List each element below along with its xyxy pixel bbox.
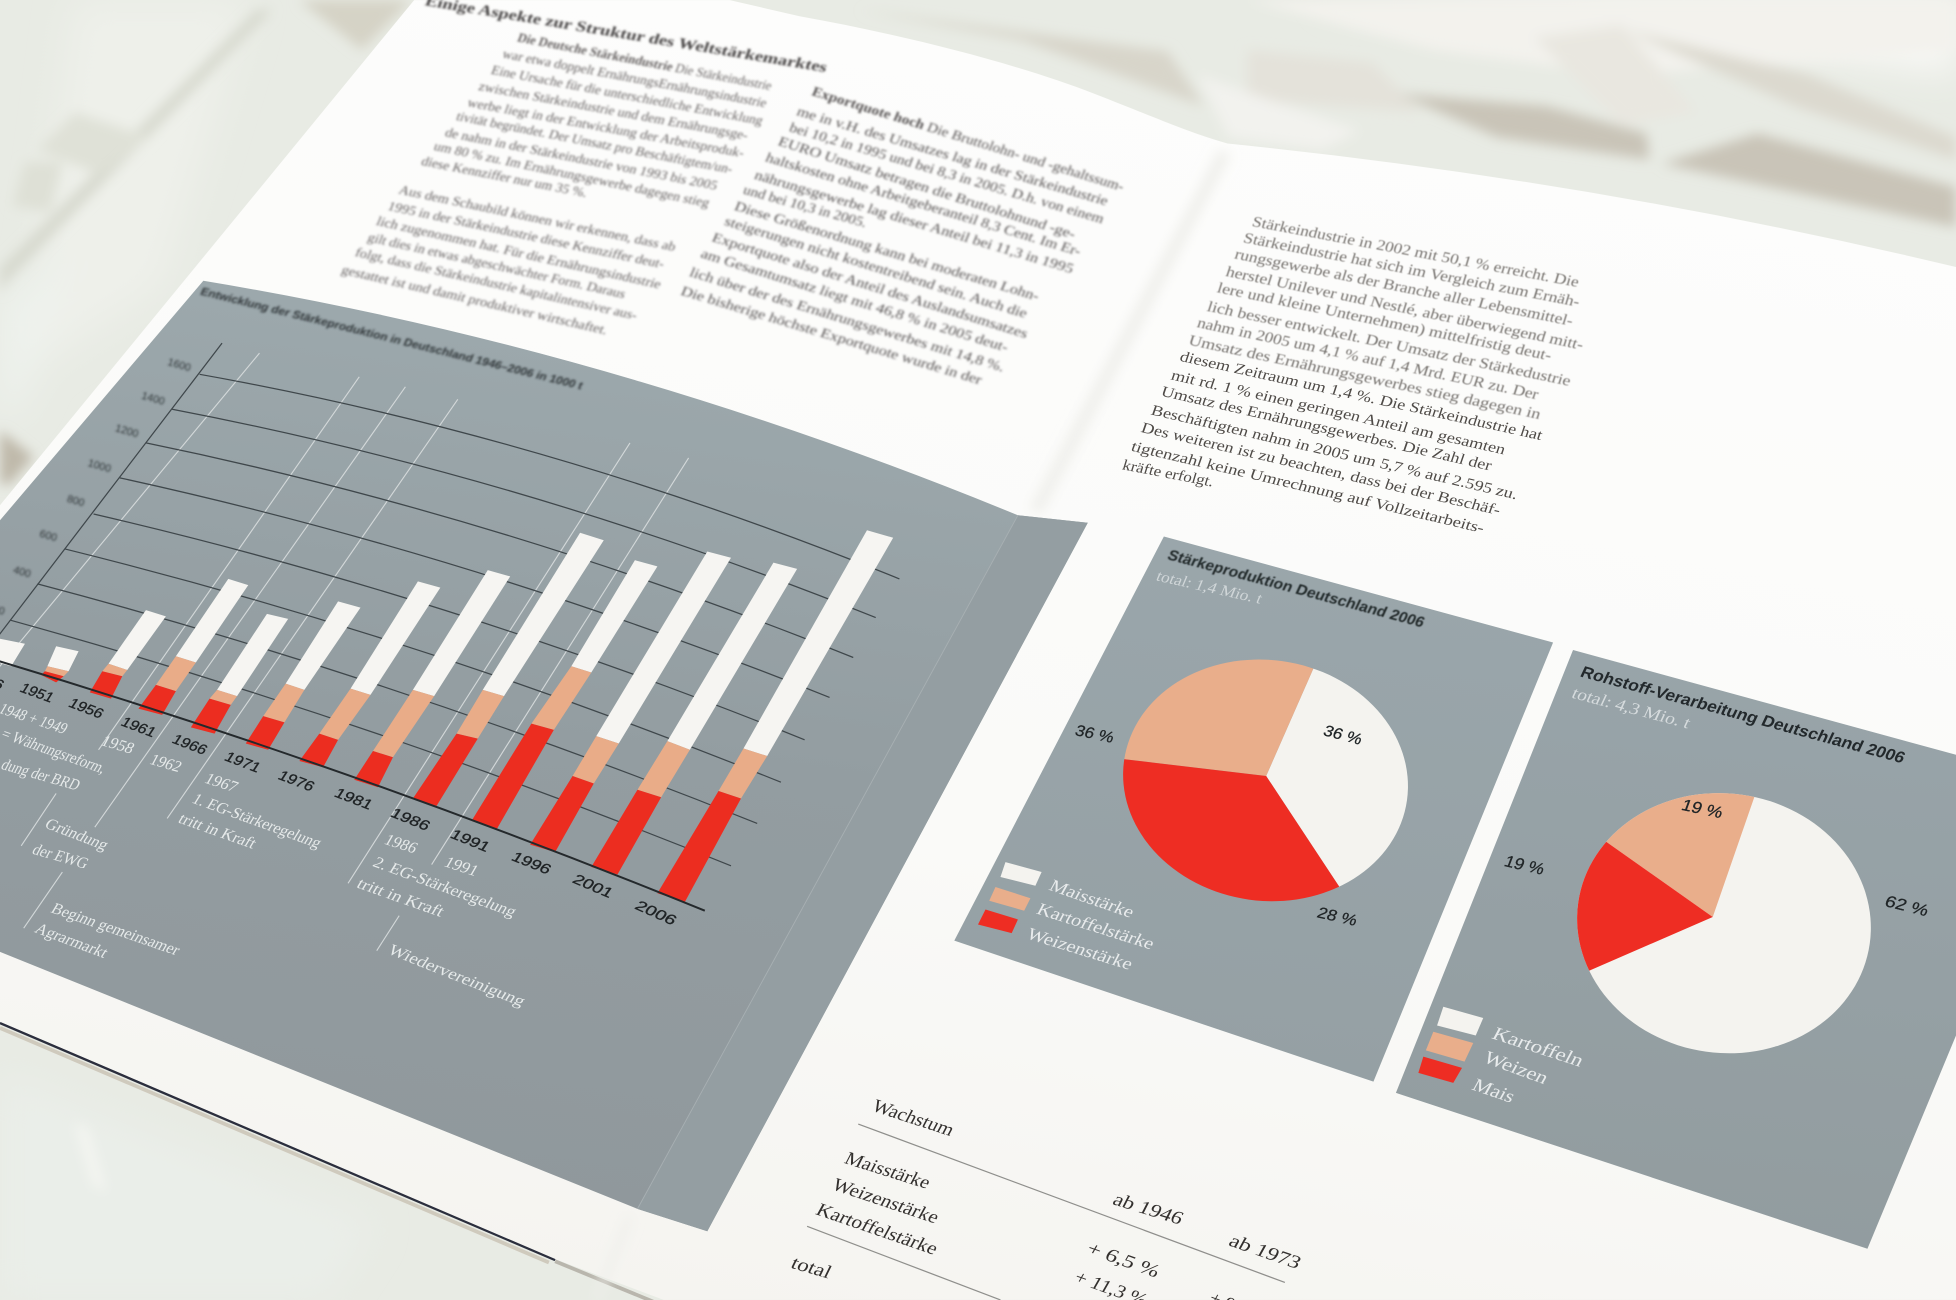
text block: left column: de nahm in der Stärkeindustrie von 1993 bis 2005 <box>443 127 719 193</box>
chart grid and axes <box>0 343 899 866</box>
legend: Kartoffeln <box>1488 1025 1588 1072</box>
year labels: 1961 <box>118 715 159 741</box>
timeline marker lines <box>0 353 689 951</box>
y axis labels <box>0 355 193 618</box>
legend: Weizen <box>1479 1048 1552 1089</box>
text block: right page upper lines: rungsgewerbe als der Branche aller Lebensmittel- <box>1233 245 1575 329</box>
year labels: 1966 <box>169 733 210 758</box>
text block: right page lower lines: mit rd. 1 % einen geringen Anteil am gesamten <box>1169 366 1508 458</box>
legend: Weizenstärke <box>1023 926 1136 974</box>
legend: Kartoffelstärke <box>1033 901 1157 954</box>
text block: middle column: bei 10,2 in 1995 und bei 8,3 in 2005. D.h. von einem <box>787 121 1107 227</box>
timeline event labels: 1986 <box>381 830 422 857</box>
pie value labels: 28 % <box>1315 904 1360 929</box>
pie value labels: 19 % <box>1679 795 1726 822</box>
text block: right page lower lines: Des weiteren ist zu beachten, dass bei der Beschäf- <box>1139 419 1503 519</box>
text block: left column: lich zugenommen hat. Für die Ernährungsindustrie <box>374 215 663 292</box>
year labels: 1996 <box>508 850 554 878</box>
text block: right page lower lines: Beschäftigten nahm in 2005 um 5,7 % auf 2.595 zu. <box>1149 401 1520 503</box>
year labels <box>0 668 679 929</box>
table: Wachstum: Weizenstärke <box>828 1176 943 1228</box>
text block: right page lower lines: Umsatz des Ernährungsgewerbes. Die Zahl der <box>1159 382 1494 474</box>
timeline event labels: 2. EG-Stärkeregelung <box>370 853 521 920</box>
text block: left column: tivität begründet. Der Umsatz pro Beschäftigtem/un- <box>454 110 735 177</box>
year labels: 1991 <box>447 828 493 855</box>
pie chart <box>1123 660 1408 902</box>
pie value labels: 36 % <box>1073 722 1117 746</box>
text block: right page lower lines: kräfte erfolgt. <box>1120 456 1216 490</box>
text block: middle column: me in v.H. des Umsatzes lag in der Stärkeindustrie <box>794 104 1110 209</box>
stacked bars <box>0 530 893 902</box>
year labels: 1971 <box>221 750 263 776</box>
timeline event labels: 1. EG-Stärkeregelung <box>189 789 326 852</box>
y axis labels: 800 <box>66 492 86 509</box>
year labels: 1981 <box>331 786 375 813</box>
legend: Mais <box>1468 1076 1518 1107</box>
pie value labels <box>1073 722 1365 929</box>
pie value labels: 36 % <box>1321 722 1365 748</box>
legend <box>1418 1007 1588 1107</box>
text block: middle column: am Gesamtumsatz liegt mit 46,8 % in 2005 deut- <box>698 247 1011 355</box>
text block: middle column: Exportquote hoch Die Bruttolohn- und -gehaltssum- <box>809 85 1127 195</box>
table: Wachstum: Wachstum <box>868 1097 958 1141</box>
text block: left column <box>339 32 774 338</box>
year labels: 2001 <box>569 873 616 901</box>
text block: middle column: Exportquote also der Anteil des Auslandsumsatzes <box>710 230 1030 342</box>
legend: Maisstärke <box>1045 877 1137 922</box>
pie chart <box>1577 793 1871 1054</box>
year labels: 1976 <box>275 769 317 795</box>
panel: starch production bar chart <box>0 281 1088 1231</box>
timeline event labels: dung der BRD <box>0 755 84 794</box>
y axis labels: 400 <box>12 563 33 580</box>
text block: middle column: Die bisherige höchste Exportquote wurde in der <box>678 284 985 388</box>
panel: Stärkeproduktion Deutschland 2006 <box>954 536 1553 1082</box>
text block: middle column: und bei 10,3 in 2005. <box>741 183 869 231</box>
text block: left column: Eine Ursache für die unterschiedliche Entwicklung <box>489 64 766 129</box>
text block: left column: gestattet ist und damit produktiver wirtschaftet. <box>339 264 609 338</box>
y axis labels: 1600 <box>166 355 193 374</box>
table: Wachstum: Kartoffelstärke <box>812 1201 942 1259</box>
table: Wachstum: ab 1973 <box>1225 1232 1304 1273</box>
pie value labels: 62 % <box>1882 892 1932 920</box>
text block: left column: war etwa doppelt Ernährungs­Ernährungsindustrie <box>500 48 769 111</box>
text block: middle column: steigerungen nicht kostentreibend sein. Auch die <box>722 214 1030 321</box>
y axis labels: 600 <box>38 527 59 544</box>
timeline event labels: 1991 <box>441 853 483 880</box>
table: Wachstum: ab 1946 <box>1109 1190 1187 1229</box>
legend <box>978 862 1157 974</box>
panel title: Rohstoff-Verarbeitung Deutschland 2006 <box>1578 662 1908 767</box>
panel subtitle: total: 1,4 Mio. t <box>1154 567 1266 607</box>
y axis labels: 1400 <box>140 389 167 407</box>
text block: left column: Die Deutsche Stärkeindustrie Die Stärkeindustrie <box>515 32 774 94</box>
year labels: 1951 <box>17 681 56 706</box>
text block: middle column: haltskosten ohne Arbeitgeberanteil 8,3 Cent. Im Er- <box>763 151 1084 259</box>
pie value labels: 19 % <box>1502 852 1548 878</box>
text block: right page upper lines: nahm in 2005 um 4,1 % auf 1,4 Mrd. EUR zu. Der <box>1195 314 1541 403</box>
panel subtitle: total: 4,3 Mio. t <box>1569 684 1694 732</box>
y axis labels: 1000 <box>87 456 113 475</box>
text block: left column: um 80 % zu. Im Ernährungsgewerbe dagegen stieg <box>431 140 712 211</box>
text block: left column: zwischen Stärkeindustrie und dem Ernährungsge- <box>476 80 751 143</box>
text block: right page lower lines: diesem Zeitraum um 1,4 %. Die Stärkeindustrie hat <box>1178 347 1546 444</box>
text block: right page upper lines: Stärkeindustrie in 2002 mit 50,1 % erreicht. Die <box>1250 213 1581 291</box>
timeline event labels: tritt in Kraft <box>175 809 261 852</box>
year labels: 2006 <box>631 899 679 929</box>
timeline event labels: tritt in Kraft <box>354 874 449 920</box>
text block: right page upper lines: herstel Unilever und Nestlé, aber überwiegend mitt- <box>1224 263 1586 353</box>
text block: right page upper lines: lere und kleine Unternehmen) mittelfristig deut- <box>1215 279 1554 364</box>
text block: right page upper lines: lich besser entwickelt. Der Umsatz der Stärkedustrie <box>1205 298 1573 389</box>
text block: right page lower lines <box>1120 347 1546 537</box>
text block: left column: gilt dies in etwas abgeschwächter Form. Daraus <box>365 231 628 302</box>
timeline event labels: Gründung <box>42 814 113 854</box>
timeline event labels <box>0 699 530 1010</box>
timeline event labels: 1958 <box>98 731 138 757</box>
text block: right page upper lines <box>1186 213 1586 423</box>
timeline event labels: Wiedervereinigung <box>385 940 530 1010</box>
table: Wachstum: + 6,5 % <box>1083 1239 1163 1282</box>
baseline <box>0 656 705 911</box>
panel title: Stärkeproduktion Deutschland 2006 <box>1165 546 1428 631</box>
timeline event labels: 1967 <box>201 769 242 796</box>
timeline event labels: 1962 <box>147 750 186 775</box>
timeline event labels: Beginn gemeinsamer <box>48 899 185 959</box>
text block: right page upper lines: Stärkeindustrie hat sich im Vergleich zum Ernäh- <box>1241 229 1582 310</box>
text block: left column: folgt, dass die Stärkeindustrie kapitalintensiver aus- <box>353 246 640 323</box>
text block: middle column: Diese Größenordnung kann bei moderaten Lohn- <box>732 199 1042 304</box>
text block: left column: 1995 in der Stärkeindustrie diese Kennziffer deut- <box>385 200 667 272</box>
text block: middle column: lich über der des Ernährungsgewerbes mit 14,8 %. <box>687 265 1007 375</box>
text block: middle column: EURO Umsatz betragen die Bruttolohnund -ge- <box>776 134 1078 242</box>
year labels: 1956 <box>65 697 106 722</box>
text block: middle column: nährungsgewerbe lag dieser Anteil bei 11,3 in 1995 <box>752 168 1076 277</box>
timeline event labels: = Währungsreform, <box>0 724 110 777</box>
panel: Rohstoff-Verarbeitung Deutschland 2006 <box>1396 650 1956 1249</box>
table: Wachstum <box>787 1097 1304 1300</box>
year labels: 1986 <box>387 806 433 834</box>
text block: right page lower lines: tigtenzahl keine Umrechnung auf Vollzeitarbeits- <box>1129 437 1487 537</box>
text block: middle column <box>678 85 1127 388</box>
text block: left column: Aus dem Schaubild können wir erkennen, dass ab <box>397 184 678 255</box>
y axis labels: 1200 <box>114 421 140 440</box>
text block: right page upper lines: Umsatz des Ernährungsgewerbes stieg dagegen in <box>1186 331 1543 423</box>
pie value labels <box>1502 795 1932 920</box>
table: Wachstum: Maisstärke <box>841 1149 934 1193</box>
timeline event labels: der EWG <box>29 840 92 872</box>
timeline event labels: Agrarmarkt <box>32 919 112 962</box>
chart title: Entwicklung der Stärkeproduktion in Deutschland 1946–2006 in 1000 t <box>199 285 585 392</box>
text block: left column: diese Kennziffer nur um 35 %. <box>419 155 589 201</box>
text block: left column: werbe liegt in der Entwicklung der Arbeitsproduk- <box>465 97 747 161</box>
table: Wachstum: total <box>787 1254 835 1283</box>
